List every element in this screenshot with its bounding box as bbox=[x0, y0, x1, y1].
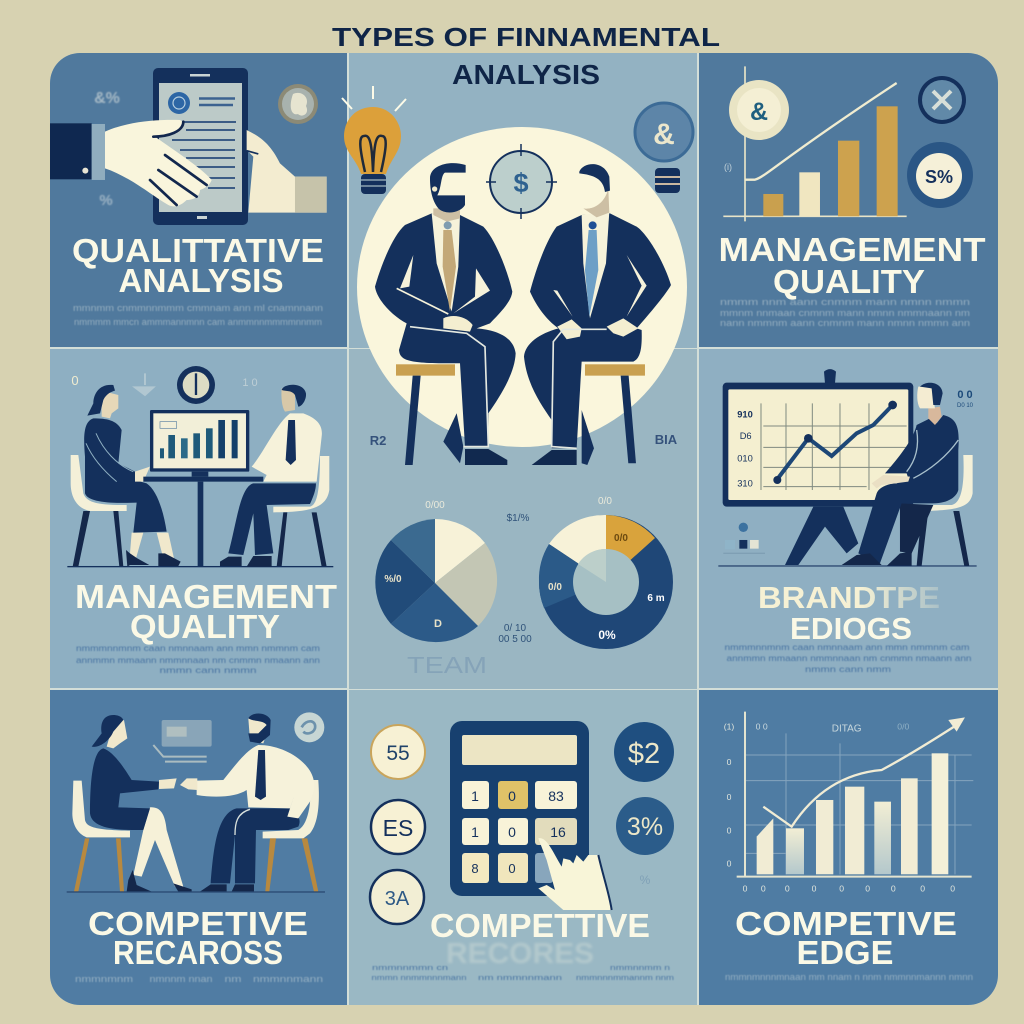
spotlight circle bbox=[357, 127, 687, 447]
icon: target bbox=[486, 144, 557, 219]
caption text: nmmnnmmn cn bbox=[372, 965, 448, 972]
caption text: nmmnmnnnmnaan mm nnam n nnm nmmnnmannn nmnn bbox=[725, 972, 973, 982]
panel: management quality left bbox=[67, 366, 337, 675]
heading: BRANDTPE bbox=[758, 580, 940, 615]
chair: left bbox=[72, 781, 130, 892]
title bbox=[332, 22, 720, 90]
heading: MANAGEMENT bbox=[718, 231, 986, 268]
heading bbox=[88, 905, 308, 971]
figure: man bbox=[220, 385, 322, 567]
title: TYPES OF FINNAMENTAL bbox=[332, 22, 720, 52]
caption text bbox=[73, 303, 323, 327]
pie chart bbox=[375, 519, 497, 642]
bar chart with arrow: 0 0 bbox=[756, 721, 768, 731]
panel: centre meeting bbox=[342, 86, 693, 465]
badge bbox=[371, 800, 425, 854]
icon: calculator: 0 bbox=[508, 861, 516, 876]
small label: 0 bbox=[71, 373, 79, 388]
caption text: nmmn nnmmnnnmann bbox=[372, 975, 467, 982]
panel: qualitative analysis bbox=[50, 68, 327, 327]
donut chart bbox=[539, 515, 673, 649]
small icons bbox=[135, 373, 153, 395]
small icons bbox=[723, 523, 765, 553]
figure: woman bbox=[90, 715, 192, 892]
icon: percent badge: S% bbox=[925, 167, 953, 187]
icon: calculator: 8 bbox=[471, 861, 479, 876]
pie chart: D bbox=[434, 618, 442, 630]
heading bbox=[75, 578, 337, 645]
heading bbox=[430, 907, 650, 970]
side labels: R2 bbox=[370, 433, 386, 448]
figure: presenter bbox=[718, 383, 977, 567]
presenter scene bbox=[718, 369, 977, 567]
icon: calculator: 16 bbox=[550, 824, 566, 840]
heading: RECAROSS bbox=[113, 934, 283, 971]
heading: QUALITY bbox=[130, 608, 280, 645]
heading: EDGE bbox=[796, 934, 894, 971]
heading: EDIOGS bbox=[790, 611, 912, 646]
panel: pie charts bbox=[375, 496, 673, 678]
presentation board: 310 bbox=[737, 478, 753, 488]
heading: QUALITY bbox=[773, 263, 925, 300]
caption text: nmmmm mmcn ammmannmnn cam anmmnnmmmmnnmm bbox=[74, 317, 322, 327]
figure: man bbox=[67, 714, 325, 893]
bar chart bbox=[723, 66, 907, 221]
bar chart with arrow: 0 bbox=[891, 883, 896, 893]
small label: 1 0 bbox=[242, 377, 258, 389]
caption text bbox=[75, 974, 323, 984]
icon: dark bulb bbox=[635, 103, 693, 193]
panel: brand edge chart bbox=[718, 369, 977, 674]
bar chart with arrow: 0 bbox=[727, 859, 732, 869]
icon: coin bbox=[729, 80, 789, 140]
chart labels: 0/ 10 bbox=[504, 623, 527, 634]
caption text: mmnmm cnmmnnmmm cmmnam ann ml cnamnnann bbox=[73, 303, 323, 313]
icon: calculator: 83 bbox=[548, 788, 564, 804]
bar chart with arrow bbox=[724, 712, 973, 893]
icon: document bbox=[153, 720, 212, 762]
caption text: nm bbox=[224, 974, 242, 984]
figure: woman bbox=[84, 385, 181, 567]
caption text bbox=[76, 643, 320, 675]
donut chart: 6 m bbox=[647, 593, 665, 604]
caption text: nmmn cann nmmn bbox=[160, 665, 257, 675]
icon: calculator bbox=[450, 721, 589, 896]
monitor chart bbox=[150, 410, 249, 477]
icon: badge bbox=[278, 84, 318, 124]
stools bbox=[396, 364, 645, 465]
heading bbox=[735, 905, 957, 971]
presentation board: 910 bbox=[737, 409, 753, 419]
presentation board: D6 bbox=[740, 431, 752, 441]
heading bbox=[718, 231, 986, 300]
badge: 55 bbox=[386, 742, 410, 765]
caption text: nmmmnnmnm caan nmnnaam ann mmn nmmnm cam bbox=[724, 642, 970, 652]
small label: (i) bbox=[724, 162, 732, 172]
caption text: annmmn mmaann nmmnnaan nm cnmmn nmaann ann bbox=[76, 655, 320, 665]
figure: left man bbox=[375, 163, 516, 465]
chart labels: 00 5 00 bbox=[498, 634, 532, 645]
icon: percent badge bbox=[907, 142, 973, 208]
chair: right bbox=[263, 780, 319, 892]
badge bbox=[614, 722, 674, 782]
small mark: % bbox=[640, 873, 651, 887]
small label: D0 10 bbox=[957, 403, 974, 409]
caption text: nmmn cann nmm bbox=[805, 664, 891, 674]
caption text bbox=[372, 965, 674, 982]
panel: competitive recards bbox=[67, 712, 325, 984]
caption text: nmmmnnmnm caan nmnnaam ann mmn nmmnm cam bbox=[76, 643, 320, 653]
chair: right bbox=[273, 456, 329, 567]
icon: tablet bbox=[153, 68, 248, 225]
heading: COMPETIVE bbox=[735, 905, 957, 942]
bar chart with arrow: (1) bbox=[724, 721, 734, 731]
heading: MANAGEMENT bbox=[75, 578, 337, 615]
icon: pointing hand bbox=[538, 838, 612, 910]
caption text: nmmnnmann bbox=[253, 974, 323, 984]
bar chart with arrow: 0 bbox=[727, 792, 732, 802]
bar chart with arrow: 0 bbox=[785, 883, 790, 893]
heading: COMPETIVE bbox=[88, 905, 308, 942]
caption text: nm nmmnnmann bbox=[478, 975, 562, 982]
badge bbox=[371, 725, 425, 779]
donut chart: 0% bbox=[598, 628, 616, 642]
icon: tools badge bbox=[918, 76, 966, 124]
badge: ES bbox=[383, 815, 413, 841]
presentation board bbox=[723, 369, 913, 565]
icon: coin: & bbox=[750, 98, 768, 126]
chart labels: $1/% bbox=[507, 513, 530, 524]
icon: lightbulb bbox=[342, 86, 406, 194]
bar chart with arrow: 0 bbox=[920, 883, 925, 893]
heading: ANALYSIS bbox=[118, 262, 284, 299]
chart labels: 0/0 bbox=[598, 496, 612, 507]
meeting scene bbox=[67, 366, 333, 567]
side labels: BIA bbox=[655, 432, 678, 447]
badge: 3% bbox=[627, 813, 663, 841]
caption text: nmmnmnm bbox=[75, 974, 133, 984]
icon: handshake bbox=[50, 120, 327, 213]
bar chart with arrow: 0 bbox=[727, 757, 732, 767]
badge bbox=[616, 797, 674, 855]
caption text: nmmnnnmmannm nnm bbox=[576, 975, 674, 982]
icon: clock badge bbox=[177, 366, 215, 404]
donut chart: 0/0 bbox=[614, 533, 628, 544]
chair: left bbox=[71, 455, 127, 567]
heading: QUALITTATIVE bbox=[72, 232, 324, 269]
bar chart with arrow: 0 bbox=[950, 883, 955, 893]
panel: management quality top right bbox=[718, 66, 986, 328]
caption text: mmnm nnmaan cnmnm mann nmnn nmmnaann nm bbox=[720, 308, 970, 318]
icon: scribble: &% bbox=[94, 90, 120, 107]
caption text: nmnnm nnan bbox=[150, 974, 212, 984]
chart labels: 0/00 bbox=[425, 500, 445, 511]
bar chart with arrow: 0 bbox=[761, 883, 766, 893]
chair bbox=[915, 455, 973, 566]
heading: COMPETTIVE bbox=[430, 907, 650, 944]
bar chart with arrow: 0 bbox=[743, 883, 748, 893]
heading bbox=[72, 232, 324, 299]
panel: competitive edge bbox=[724, 712, 973, 982]
figure: right man bbox=[524, 164, 671, 465]
handshake scene bbox=[67, 712, 325, 893]
chart labels bbox=[425, 496, 612, 645]
heading bbox=[758, 580, 940, 646]
icon: small mark: % bbox=[99, 192, 113, 209]
icon: calculator: 0 bbox=[508, 788, 516, 804]
caption text: annmmn mmaann nmmnnaan nm cnmmn nmaann ann bbox=[726, 653, 972, 663]
icon: calculator: 1 bbox=[471, 824, 479, 840]
panel: calculator bbox=[370, 721, 674, 982]
badge bbox=[370, 870, 424, 924]
icon: mark bbox=[294, 712, 324, 742]
donut chart: 0/0 bbox=[548, 582, 562, 593]
pie chart: %/0 bbox=[384, 574, 402, 585]
title: ANALYSIS bbox=[452, 59, 600, 90]
icon: target: $ bbox=[513, 168, 529, 198]
badge: 3A bbox=[385, 888, 410, 910]
icon: dark bulb: & bbox=[653, 118, 675, 151]
badge: $2 bbox=[628, 738, 660, 770]
faded team label: TEAM bbox=[407, 652, 487, 678]
icon: calculator: 0 bbox=[508, 824, 516, 840]
bar chart with arrow: 0 bbox=[727, 825, 732, 835]
bar chart with arrow: 0 bbox=[865, 883, 870, 893]
caption text: nmmm nnm aann cnmnm mann nmnn nmmn bbox=[720, 297, 970, 307]
caption text bbox=[724, 642, 972, 674]
bar chart with arrow: 0/0 bbox=[897, 721, 910, 731]
bar chart with arrow: 0 bbox=[839, 883, 844, 893]
caption text bbox=[720, 297, 970, 328]
icon: calculator: 1 bbox=[471, 788, 479, 804]
small label: 0 0 bbox=[957, 389, 973, 401]
caption text: nann nmmnm aann cnmnm mann nmnn nmmn ann bbox=[720, 318, 970, 328]
heading: RECORES bbox=[446, 938, 594, 970]
table bbox=[67, 477, 333, 567]
bar chart with arrow: DITAG bbox=[832, 724, 862, 735]
bar chart with arrow: 0 bbox=[812, 883, 817, 893]
caption text: nmmnnmm n bbox=[610, 965, 670, 972]
presentation board: 010 bbox=[737, 453, 753, 463]
